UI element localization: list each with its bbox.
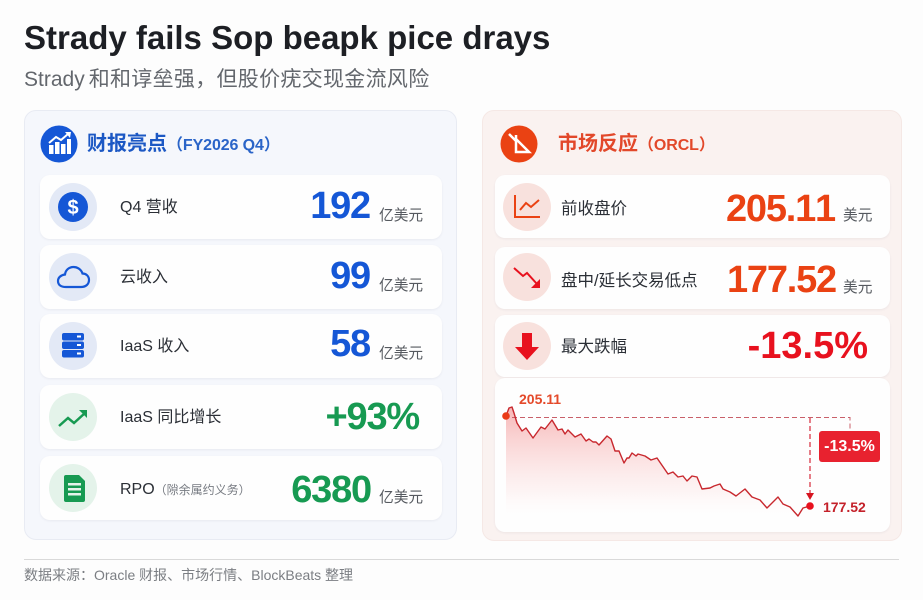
label: 前收盘价 xyxy=(561,200,627,218)
icon: cloud xyxy=(49,253,97,301)
icon: down arrow xyxy=(503,322,551,370)
row: max drop xyxy=(495,315,890,378)
value: 6380 xyxy=(291,469,371,511)
label: IaaS 收入 xyxy=(120,338,189,355)
chart card: price line xyxy=(495,378,890,532)
subtitle: Strady和和谆垒强，但股价疣交现金流风险 xyxy=(24,68,430,91)
icon: dollar: $ xyxy=(67,197,79,219)
title: Strady fails Sop beapk pice drays xyxy=(24,19,550,56)
line chart: 205.11 xyxy=(519,391,561,407)
row: Q4 revenue xyxy=(40,175,442,240)
label: Q4 营收 xyxy=(120,199,178,216)
value: 205.11 xyxy=(726,188,835,230)
icon: rising bar chart xyxy=(40,126,78,162)
icon: falling triangle xyxy=(500,126,538,162)
icon: document xyxy=(49,464,97,512)
panel heading: 财报亮点（FY2026 Q4） xyxy=(87,133,280,155)
unit: 亿美元 xyxy=(379,490,423,506)
panel heading: 市场反应（ORCL） xyxy=(558,133,715,155)
unit: 亿美元 xyxy=(379,346,423,362)
line chart: 177.52 xyxy=(823,499,866,515)
divider xyxy=(24,559,899,560)
value: 177.52 xyxy=(727,259,836,301)
unit: 亿美元 xyxy=(379,278,423,294)
source note: 数据来源：Oracle 财报、市场行情、BlockBeats 整理 xyxy=(24,567,353,583)
icon: trend up xyxy=(49,393,97,441)
value: 58 xyxy=(330,323,370,365)
row: IaaS revenue xyxy=(40,314,442,378)
label: 盘中/延长交易低点 xyxy=(561,272,698,290)
label: 最大跌幅 xyxy=(561,338,627,356)
row: intraday low xyxy=(495,247,890,310)
row: RPO xyxy=(40,456,442,520)
icon: dollar xyxy=(49,183,97,231)
unit: 美元 xyxy=(843,208,872,224)
row: IaaS growth xyxy=(40,385,442,450)
label: 云收入 xyxy=(120,269,168,286)
value: 192 xyxy=(310,185,370,227)
label: IaaS 同比增长 xyxy=(120,409,221,426)
row: cloud revenue xyxy=(40,245,442,310)
value: -13.5% xyxy=(748,325,868,367)
label: RPO（隙余属约义务） xyxy=(120,481,251,498)
row: previous close xyxy=(495,175,890,238)
icon: trend down xyxy=(503,253,551,301)
unit: 美元 xyxy=(843,280,872,296)
unit: 亿美元 xyxy=(379,208,423,224)
value: +93% xyxy=(326,396,419,438)
icon: server stack xyxy=(49,322,97,370)
callout: drop badge: -13.5% xyxy=(824,438,875,455)
value: 99 xyxy=(330,255,370,297)
panel: market reaction xyxy=(482,110,902,541)
icon: line chart xyxy=(503,183,551,231)
callout: drop badge xyxy=(819,431,880,462)
panel: financial highlights xyxy=(24,110,457,540)
